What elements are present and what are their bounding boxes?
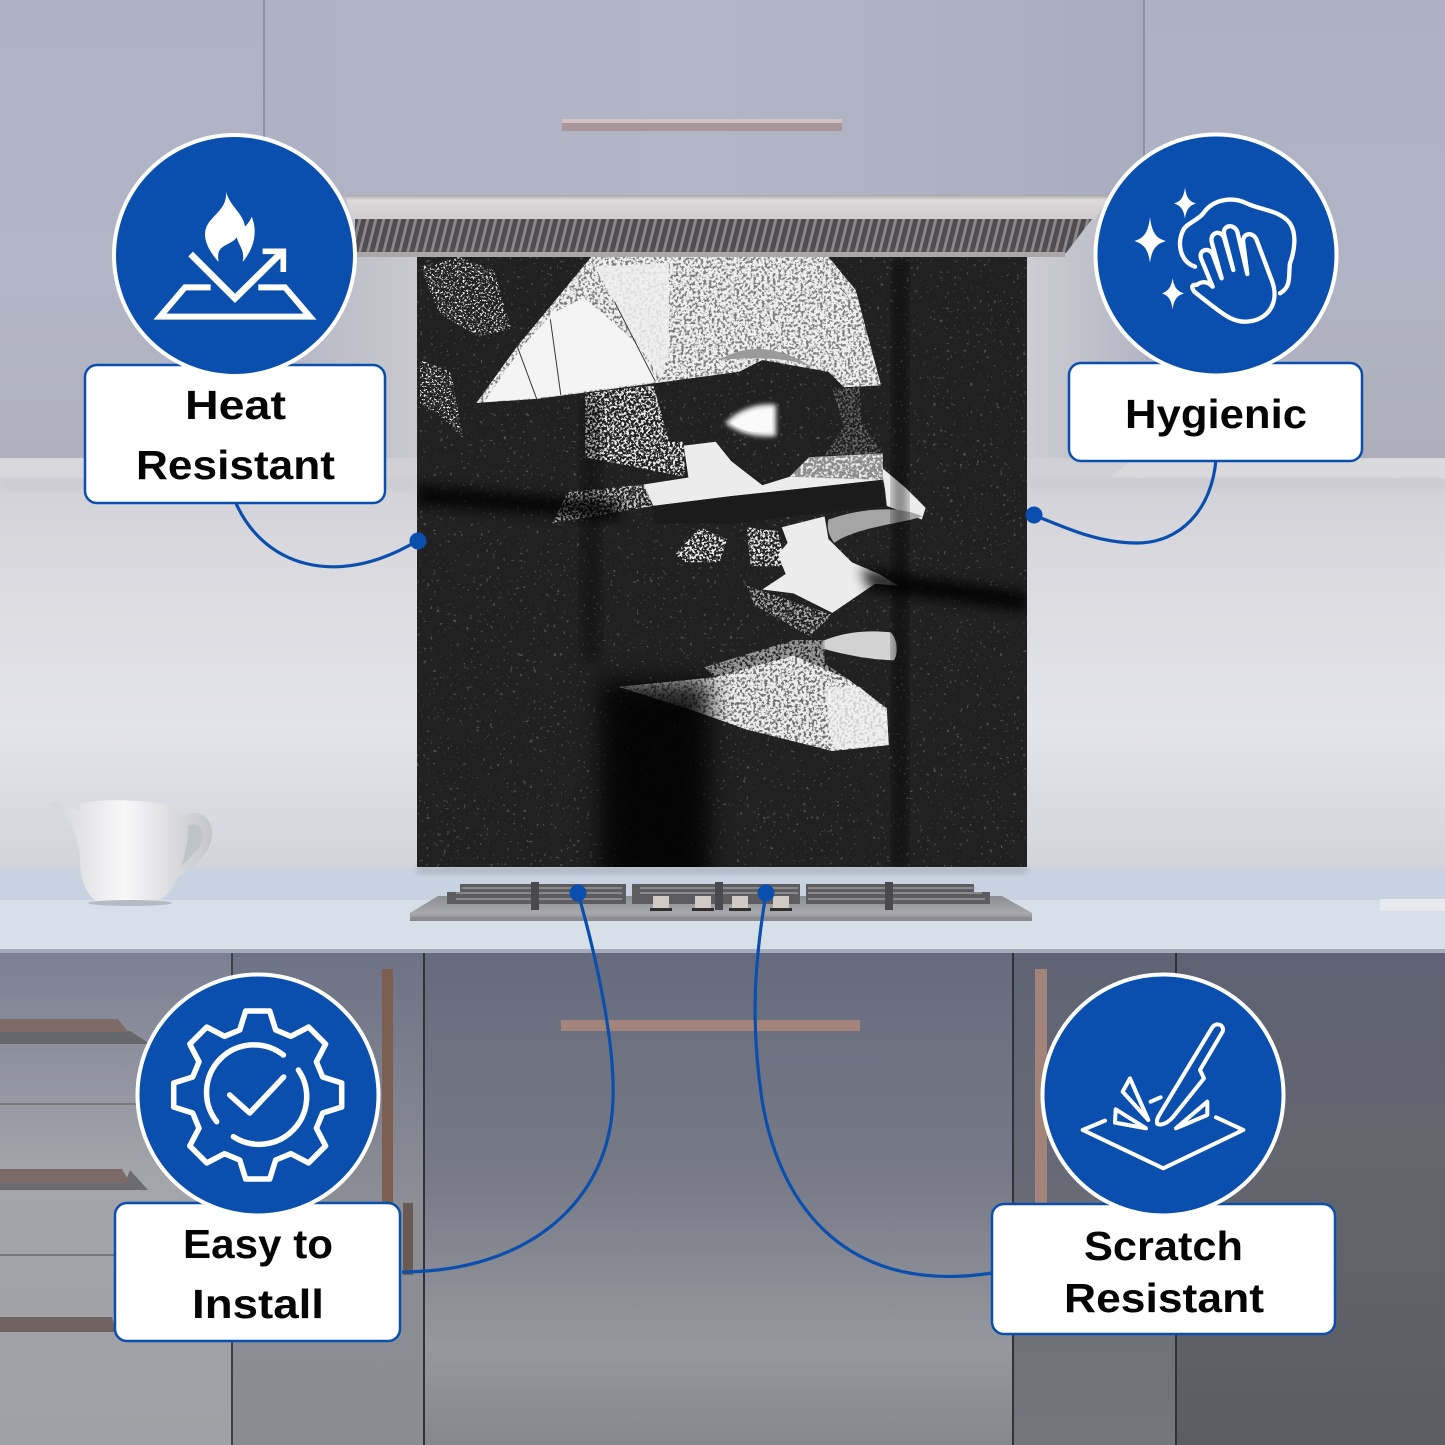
upper cabinet handle	[562, 119, 842, 131]
label: scratch resistant: Scratch	[1084, 1223, 1243, 1269]
left wall scraps	[420, 257, 511, 438]
extractor hood	[345, 195, 1110, 257]
cheekbone and bridge shading	[825, 387, 883, 455]
icon: easy to install badge	[138, 974, 378, 1216]
label: heat resistant	[85, 365, 385, 503]
label: easy to install: Install	[192, 1281, 324, 1327]
grey scratched stripe	[552, 485, 653, 523]
label: easy to install: Easy to	[183, 1221, 333, 1267]
connector: heat resistant	[235, 501, 426, 567]
connector: easy to install	[402, 884, 613, 1272]
surface plate	[160, 287, 310, 317]
hand	[1192, 226, 1274, 322]
portrait dark stripe	[653, 480, 886, 523]
surface plate	[1083, 1117, 1243, 1168]
reflect arrow	[191, 251, 283, 298]
worktop	[0, 866, 1445, 954]
portrait eye	[725, 404, 776, 436]
gear	[174, 1011, 342, 1179]
knife	[1157, 1024, 1223, 1125]
portrait lips and chin	[618, 631, 897, 751]
brow	[720, 349, 813, 368]
upper cabinets	[0, 0, 1445, 458]
connector: scratch resistant	[755, 884, 992, 1276]
label: heat resistant: Heat	[185, 382, 286, 428]
shards	[1115, 1078, 1207, 1128]
ring	[207, 1045, 307, 1144]
artwork reflections	[417, 257, 1027, 890]
panel: glass splashback artwork	[417, 257, 1027, 890]
under-cabinet ledges	[0, 458, 1445, 490]
icon: hygienic badge	[1096, 134, 1336, 376]
label: scratch resistant: Resistant	[1064, 1275, 1264, 1321]
wall backsplash	[0, 458, 1445, 870]
forehead	[476, 257, 881, 403]
label: scratch resistant	[992, 1204, 1335, 1334]
artwork speckle texture	[417, 257, 1027, 867]
gas hob	[410, 882, 1032, 921]
icon: heat resistant badge	[114, 135, 355, 376]
cloth	[1180, 200, 1294, 293]
portrait cheek strip	[644, 442, 926, 613]
textured temple block	[585, 385, 786, 566]
lower cabinets	[0, 953, 1445, 1445]
label: hygienic	[1069, 363, 1362, 461]
flame	[205, 192, 255, 262]
connector: hygienic	[1026, 459, 1216, 543]
icon: scratch resistant badge	[1042, 974, 1284, 1216]
label: heat resistant: Resistant	[136, 442, 335, 488]
check mark	[230, 1077, 284, 1113]
sparkles	[1134, 187, 1196, 309]
white jug	[52, 800, 212, 906]
cabinet handles	[0, 969, 1047, 1332]
label: easy to install	[115, 1203, 400, 1341]
artwork portrait fragments	[420, 257, 926, 751]
label: hygienic: Hygienic	[1125, 391, 1307, 437]
lower cheek texture	[747, 586, 832, 636]
